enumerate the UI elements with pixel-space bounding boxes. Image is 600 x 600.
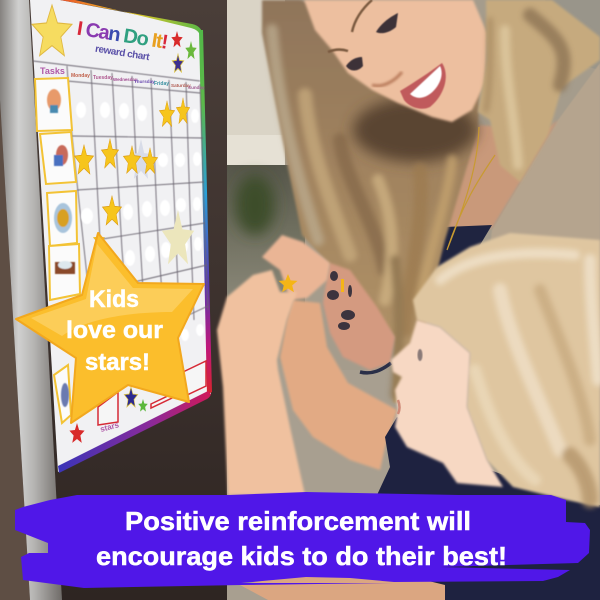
chart title: I Can Do It! <box>75 18 170 54</box>
pale stars <box>130 139 194 264</box>
boy: hair <box>413 233 600 507</box>
refrigerator door <box>0 0 227 600</box>
mother: chest <box>445 120 558 228</box>
banner text <box>96 506 507 571</box>
weekday labels: Monday <box>71 73 90 79</box>
boy: hair highlights <box>440 253 598 500</box>
hair right strands <box>486 15 564 165</box>
velcro dots <box>76 102 204 341</box>
callout text: love our <box>66 317 163 344</box>
small stars row <box>69 387 148 443</box>
weekday labels: Sunday <box>188 85 205 90</box>
weekday labels: Wednesday <box>113 77 138 82</box>
mother: wristband <box>360 363 391 373</box>
left wall strip <box>0 100 30 600</box>
rainbow border right <box>199 30 212 395</box>
mother: face <box>304 0 487 122</box>
weekday labels: Saturday <box>171 83 191 88</box>
eyes <box>346 13 398 70</box>
weekday labels: Tasks <box>40 66 65 76</box>
yellow reward stars <box>74 98 190 246</box>
rainbow border top <box>60 0 203 36</box>
task pictures <box>47 89 75 407</box>
task cards <box>35 78 80 423</box>
banner text: encourage kids to do their best! <box>96 541 507 571</box>
boy: arm right <box>280 300 397 470</box>
chart grid <box>33 61 208 360</box>
boy: arm left <box>217 270 305 495</box>
lower arm under banner <box>240 574 445 600</box>
mother: hair strands <box>272 30 452 395</box>
mother: shadow under chin <box>353 98 477 162</box>
mother: hand <box>323 263 395 370</box>
mother: sweater <box>470 63 600 420</box>
refrigerator handle <box>0 0 62 600</box>
smile <box>400 63 446 109</box>
header stars <box>171 31 197 72</box>
boy: fingers top hand <box>262 235 330 300</box>
stars label: stars <box>99 420 121 434</box>
weekday labels: Thursday <box>134 79 155 84</box>
boy: shirt <box>368 417 600 600</box>
small star between fingers <box>341 279 344 292</box>
chart board <box>30 0 211 472</box>
chart big gold star <box>32 5 72 56</box>
mother: hair back <box>262 0 480 403</box>
banner text: Positive reinforcement will <box>125 506 471 536</box>
weekday labels <box>40 66 205 90</box>
boy: mouth <box>398 400 400 414</box>
teeth <box>410 66 442 98</box>
chart title: reward chart <box>94 44 151 63</box>
nails <box>327 271 355 330</box>
weekday labels: Friday <box>154 81 169 87</box>
mother: necklace <box>447 127 495 250</box>
yellow star in fingers <box>278 274 298 292</box>
star highlight <box>31 244 193 336</box>
mother: navy top <box>432 225 492 290</box>
boy: eye <box>418 349 422 361</box>
rainbow border bottom <box>58 391 211 473</box>
purple brush banner <box>15 492 590 588</box>
eyebrows <box>328 0 372 52</box>
weekday labels: Tuesday <box>93 75 113 81</box>
callout text <box>66 286 163 376</box>
reward boxes <box>98 361 206 425</box>
callout text: Kids <box>89 286 139 313</box>
nose shadow <box>372 72 402 86</box>
big star callout <box>16 233 204 423</box>
callout text: stars! <box>85 349 150 376</box>
mother: hair right <box>478 0 600 182</box>
reward chart <box>30 0 212 473</box>
boy: face <box>391 320 503 487</box>
